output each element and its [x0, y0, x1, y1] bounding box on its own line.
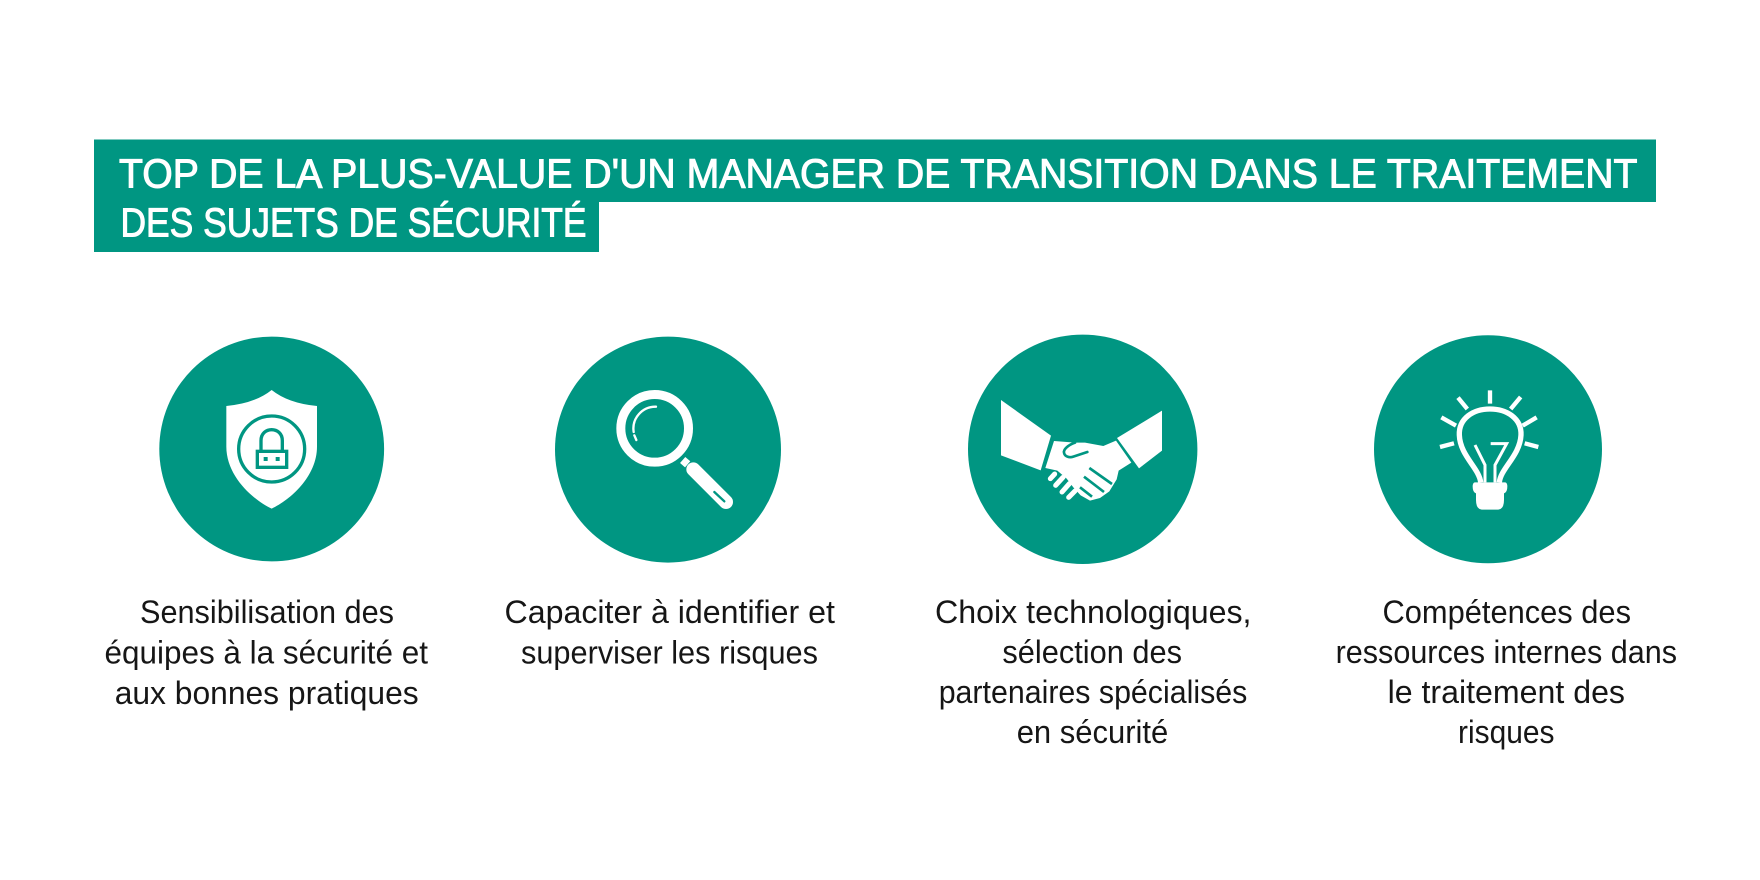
text: sensibilisation: équipes à la sécurité et — [104, 634, 428, 670]
icon: handshake — [968, 335, 1197, 564]
text: choix technologiques: en sécurité — [1017, 714, 1168, 750]
panel: compétences — [1336, 335, 1677, 750]
panel: sensibilisation — [104, 337, 428, 711]
icon: light bulb — [1374, 335, 1602, 563]
text: compétences: risques — [1458, 714, 1554, 750]
text: compétences: le traitement des — [1388, 674, 1625, 710]
text: sensibilisation — [104, 594, 428, 711]
icon: magnifying glass — [555, 337, 781, 563]
text: choix technologiques: sélection des — [1002, 634, 1182, 670]
title: TOP DE LA PLUS-VALUE D'UN MANAGER DE TRANSITION DANS LE TRAITEMENT — [119, 150, 1638, 196]
text: choix technologiques: Choix technologiques, — [935, 594, 1252, 630]
title: DES SUJETS DE SÉCURITÉ — [120, 200, 586, 246]
text: choix technologiques: partenaires spécialisés — [939, 674, 1247, 710]
text: choix technologiques — [935, 594, 1252, 750]
text: capacité: Capaciter à identifier et — [504, 594, 835, 630]
text: compétences: Compétences des — [1382, 594, 1631, 630]
text: sensibilisation: Sensibilisation des — [140, 594, 394, 630]
text: compétences: ressources internes dans — [1336, 634, 1677, 670]
title — [94, 140, 1656, 252]
panel: capacité — [504, 337, 835, 670]
panel: choix technologiques — [935, 335, 1252, 750]
text: sensibilisation: aux bonnes pratiques — [115, 675, 419, 711]
text: capacité: superviser les risques — [521, 634, 818, 670]
icon: shield with padlock — [159, 337, 384, 561]
text: capacité — [504, 594, 835, 670]
text: compétences — [1336, 594, 1677, 750]
